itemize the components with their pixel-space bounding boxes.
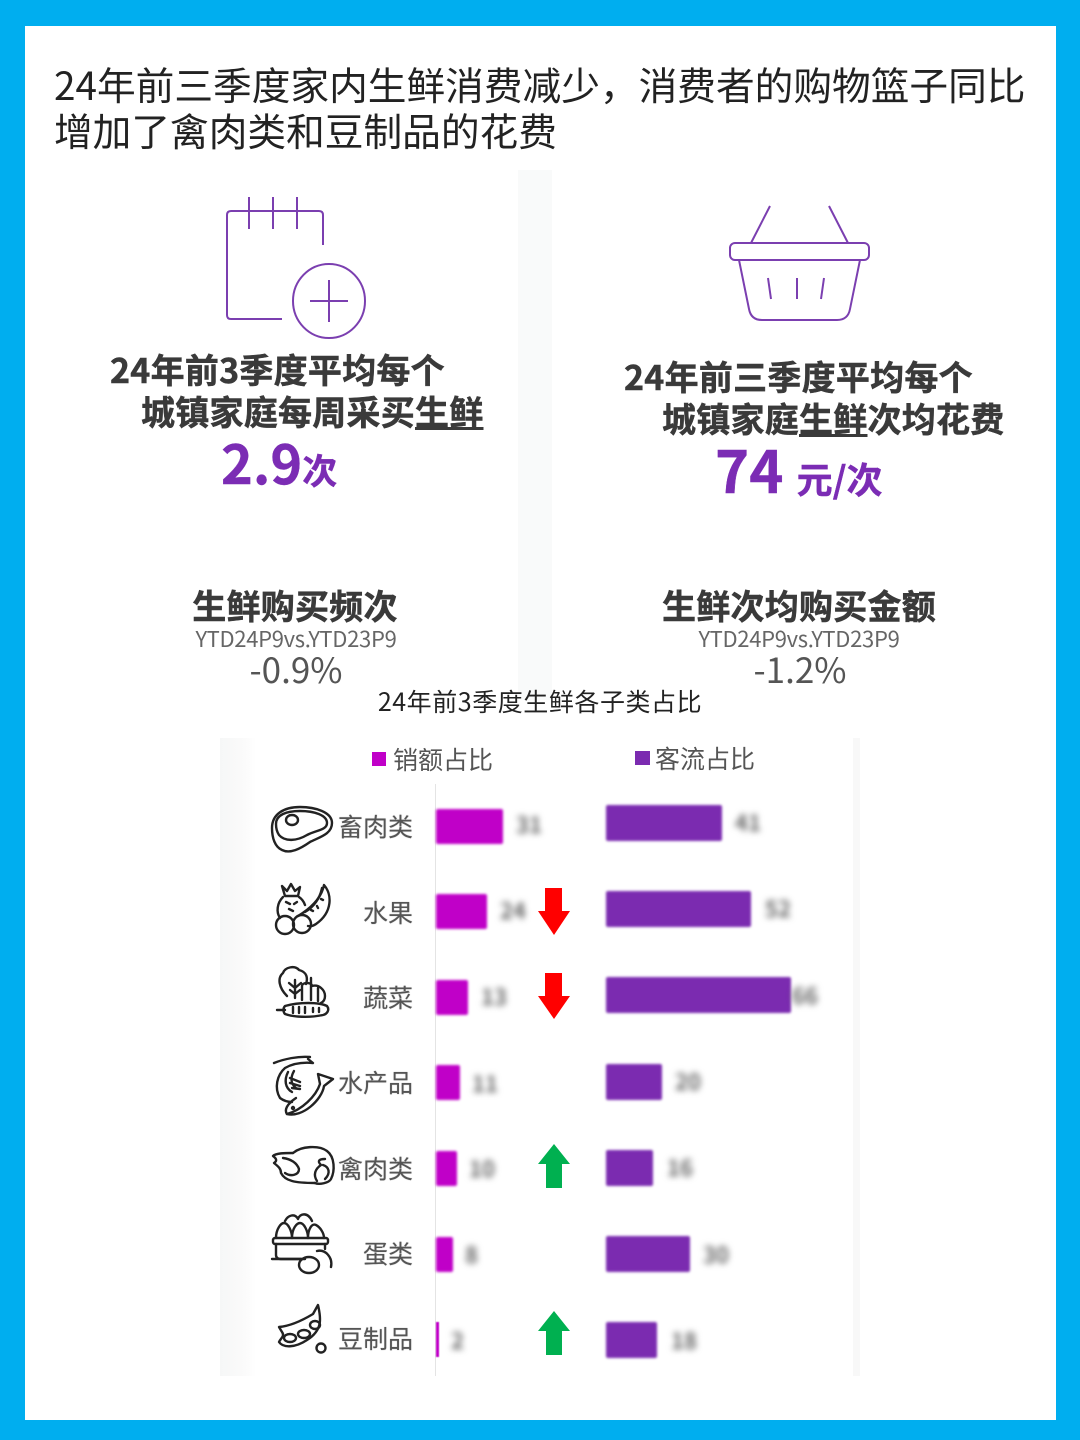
panel: frequency bbox=[110, 197, 484, 694]
sales bar bbox=[436, 1151, 457, 1186]
icon: up arrow bbox=[538, 1144, 570, 1188]
traffic bar bbox=[606, 891, 751, 927]
metric change: -1.2% bbox=[754, 643, 846, 694]
row: poultry bbox=[272, 1144, 696, 1188]
label: 水果 bbox=[363, 894, 413, 930]
metric period: YTD24P9vs.YTD23P9 bbox=[699, 622, 899, 654]
sales bar bbox=[436, 1237, 453, 1272]
title: 增加了禽肉类和豆制品的花费 bbox=[54, 102, 557, 158]
label: 畜肉类 bbox=[338, 808, 413, 844]
row: eggs bbox=[270, 1213, 732, 1274]
sales bar bbox=[436, 1065, 460, 1100]
row: vegetables bbox=[276, 966, 822, 1019]
label: 禽肉类 bbox=[338, 1150, 413, 1186]
blurred value: 16 bbox=[667, 1151, 693, 1183]
icon: steak bbox=[270, 806, 334, 853]
blurred value: 20 bbox=[675, 1065, 701, 1097]
metric name: 生鲜次均购买金额 bbox=[662, 580, 936, 629]
row: aquatic bbox=[272, 1056, 704, 1116]
sales bar bbox=[436, 894, 487, 929]
blurred value: 30 bbox=[703, 1238, 729, 1270]
blurred value: 41 bbox=[735, 806, 761, 838]
value: 74 yuan per time: 74 元/次 bbox=[715, 426, 883, 510]
traffic bar bbox=[606, 1064, 662, 1100]
title: 24年前三季度家内生鲜消费减少，消费者的购物篮子同比 bbox=[54, 56, 1025, 112]
chart: category shares bbox=[220, 738, 436, 1376]
icon: down arrow bbox=[538, 973, 570, 1019]
value: 2.9 times: 2.9次 bbox=[221, 421, 337, 500]
label: 蔬菜 bbox=[363, 979, 413, 1015]
sales bar bbox=[436, 809, 503, 844]
row: soy products bbox=[278, 1304, 700, 1360]
legend: sales share: 销额占比 bbox=[393, 741, 493, 777]
icon: fruit bbox=[274, 882, 331, 936]
traffic bar bbox=[606, 1322, 657, 1358]
traffic bar bbox=[606, 977, 791, 1013]
icon: roast chicken bbox=[272, 1146, 335, 1185]
panel: spend bbox=[624, 206, 1004, 694]
vertical divider band bbox=[518, 170, 552, 700]
heading: frequency line two: 城镇家庭每周采买生鲜 bbox=[141, 386, 484, 435]
blurred value: 52 bbox=[765, 892, 791, 924]
icon: down arrow bbox=[538, 888, 570, 935]
sales bar bbox=[436, 1322, 439, 1357]
label: 豆制品 bbox=[338, 1320, 413, 1356]
blurred value: 10 bbox=[469, 1152, 495, 1184]
icon: soybeans bbox=[278, 1304, 327, 1354]
heading: frequency description: 24年前3季度平均每个 bbox=[110, 344, 445, 393]
metric name: 生鲜购买频次 bbox=[192, 580, 398, 629]
blurred value: 18 bbox=[671, 1324, 697, 1356]
label: 水产品 bbox=[338, 1064, 413, 1100]
blurred value: 2 bbox=[451, 1324, 464, 1356]
traffic bar bbox=[606, 1150, 653, 1186]
heading: spend line two: 城镇家庭生鲜次均花费 bbox=[662, 393, 1004, 442]
legend: traffic share: 客流占比 bbox=[655, 740, 755, 776]
metric change: -0.9% bbox=[250, 643, 342, 694]
label: 蛋类 bbox=[363, 1235, 413, 1271]
icon: basket bbox=[729, 206, 870, 321]
blurred value: 8 bbox=[465, 1238, 478, 1270]
blurred value: 13 bbox=[481, 980, 507, 1012]
blurred value: 66 bbox=[792, 979, 818, 1011]
icon: vegetables bbox=[276, 966, 330, 1018]
icon: shrimp and fish bbox=[272, 1056, 334, 1116]
icon: calendar plus bbox=[226, 197, 366, 339]
row: fruit bbox=[274, 882, 794, 936]
blurred value: 24 bbox=[500, 894, 526, 926]
metric period: YTD24P9vs.YTD23P9 bbox=[196, 622, 396, 654]
blurred value: 11 bbox=[472, 1067, 498, 1099]
heading: spend description: 24年前三季度平均每个 bbox=[624, 351, 973, 400]
icon: egg basket bbox=[270, 1213, 333, 1274]
traffic bar bbox=[606, 805, 722, 841]
blurred value: 31 bbox=[516, 808, 542, 840]
traffic bar bbox=[606, 1236, 690, 1272]
icon: up arrow bbox=[538, 1311, 570, 1355]
row: red meat bbox=[270, 803, 763, 853]
title bbox=[54, 56, 1025, 158]
sales bar bbox=[436, 980, 468, 1015]
chart title: 24年前3季度生鲜各子类占比 bbox=[378, 683, 702, 719]
